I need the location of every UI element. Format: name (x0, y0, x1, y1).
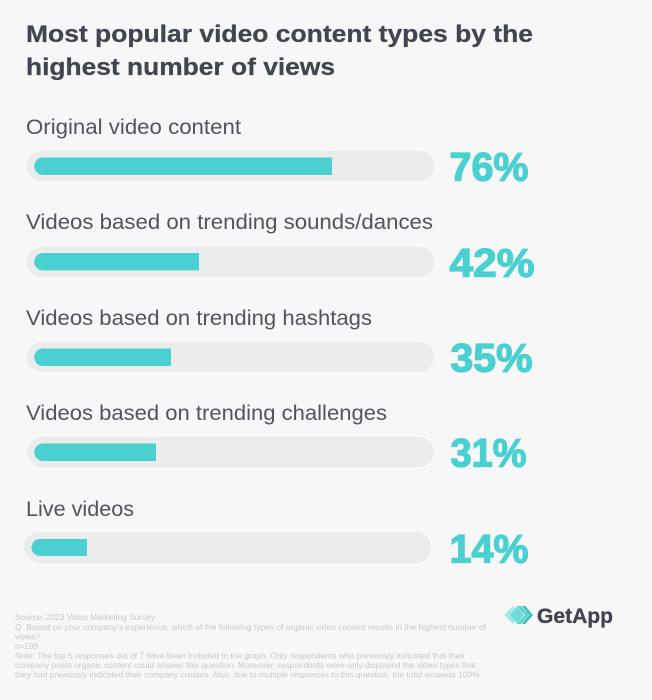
bar track (24, 532, 431, 563)
title: Most popular video content types by the (26, 21, 533, 48)
footnote: Q: Based on your company's experience, which of the following types of organic video content results in the highest number of (15, 623, 487, 632)
wordmark: GetApp (537, 605, 613, 628)
title (26, 21, 533, 81)
footnote: Note: The top 5 responses out of 7 have been included in the graph. Only respondents who previously indicated that their (15, 652, 465, 660)
row: trending challenges (26, 402, 526, 476)
row: trending hashtags (26, 307, 532, 380)
logo: GetApp (504, 605, 613, 628)
value: 31% (450, 432, 526, 476)
bar fill (34, 158, 332, 175)
bar track (27, 437, 434, 467)
icon: diamonds (504, 606, 533, 624)
bar fill (34, 348, 171, 366)
label: Live videos (26, 498, 134, 521)
label: Original video content (26, 116, 241, 139)
title: highest number of views (26, 54, 335, 81)
bar track (27, 247, 434, 277)
value: 42% (450, 242, 534, 286)
footnote: n=198 (15, 642, 39, 651)
bar fill (34, 253, 199, 270)
value: 76% (450, 146, 528, 190)
row: original video content (26, 116, 528, 190)
row: live videos (24, 498, 528, 572)
footnote: they had previously indicated their company creates. Also, due to multiple responses to this question, the total exceeds 100%. (15, 670, 482, 680)
value: 35% (450, 336, 532, 380)
label: Videos based on trending sounds/dances (26, 211, 433, 234)
bar track (27, 342, 434, 372)
label: Videos based on trending challenges (26, 402, 387, 425)
footnote: company posts organic content could answer this question. Moreover, respondents were only displayed the video types that (15, 661, 477, 670)
footnote (15, 613, 487, 680)
value: 14% (450, 528, 528, 572)
row: trending sounds/dances (26, 211, 534, 286)
bar fill (32, 539, 87, 556)
label: Videos based on trending hashtags (26, 307, 372, 330)
footnote: views? (15, 632, 41, 642)
footnote: Source: 2023 Video Marketing Survey (15, 613, 155, 622)
bar track (27, 151, 434, 181)
bar fill (34, 444, 156, 461)
